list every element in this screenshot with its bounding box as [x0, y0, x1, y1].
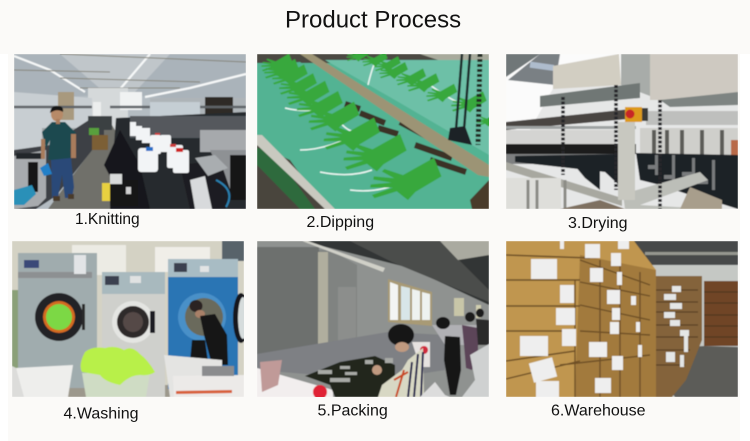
bins	[257, 368, 333, 397]
caption: knitting: 1.Knitting	[75, 211, 140, 228]
standing workers	[436, 317, 450, 329]
windows	[388, 279, 432, 326]
middle stack	[655, 276, 702, 397]
rail beam	[300, 54, 489, 177]
photo: warehouse	[506, 241, 738, 397]
left machines	[14, 118, 104, 209]
caption: warehouse: 6.Warehouse	[551, 402, 646, 420]
labels	[520, 241, 642, 397]
chains	[563, 85, 660, 209]
photo: washing	[12, 241, 249, 397]
dryer left	[18, 253, 97, 388]
gloves on rack	[506, 154, 621, 164]
frame	[506, 162, 622, 206]
ceiling duct	[302, 241, 489, 305]
left wall	[14, 92, 92, 150]
floor	[48, 125, 116, 209]
right machines	[114, 112, 246, 209]
right wall and windows	[150, 98, 246, 114]
caption: washing: 4.Washing	[64, 406, 138, 422]
gloves	[261, 48, 499, 200]
orange switch box	[625, 107, 642, 122]
gloves pile	[305, 356, 395, 397]
overhead rails	[14, 106, 246, 108]
photo: packing	[257, 241, 489, 399]
dryer middle	[146, 370, 166, 397]
back wall and floor	[640, 241, 738, 397]
worker	[40, 106, 76, 201]
photo: knitting	[14, 54, 246, 209]
gloves gray fingers	[648, 155, 715, 190]
white sacks	[462, 344, 489, 397]
worker	[190, 300, 202, 312]
green tank highlights	[325, 60, 489, 155]
central post	[618, 122, 635, 200]
basket	[14, 185, 36, 205]
caption: drying: 3.Drying	[568, 215, 628, 232]
bins	[16, 365, 73, 397]
photo: dipping	[257, 48, 499, 209]
woman in striped shirt	[378, 348, 424, 397]
partition wall	[257, 332, 445, 380]
center machine	[104, 130, 150, 209]
posts and chain	[456, 54, 470, 130]
back stack	[704, 281, 738, 346]
overhead panels	[553, 54, 621, 89]
dark crossbars	[345, 104, 466, 172]
long beams	[506, 109, 626, 131]
dryer right	[168, 276, 239, 390]
front stack	[506, 241, 656, 397]
caption: packing: 5.Packing	[318, 402, 388, 420]
caption: dipping: 2.Dipping	[306, 214, 374, 231]
photo: drying	[506, 54, 738, 209]
white gloss	[285, 60, 470, 191]
concrete floor at lower left	[257, 145, 325, 209]
ceiling	[506, 54, 622, 130]
thread cones	[130, 122, 189, 173]
back top	[257, 54, 438, 64]
green gloves pile	[81, 347, 155, 385]
back wall	[88, 88, 128, 130]
title: Product Process	[285, 6, 461, 34]
ceiling	[14, 54, 245, 98]
conveyor dark	[506, 144, 636, 154]
